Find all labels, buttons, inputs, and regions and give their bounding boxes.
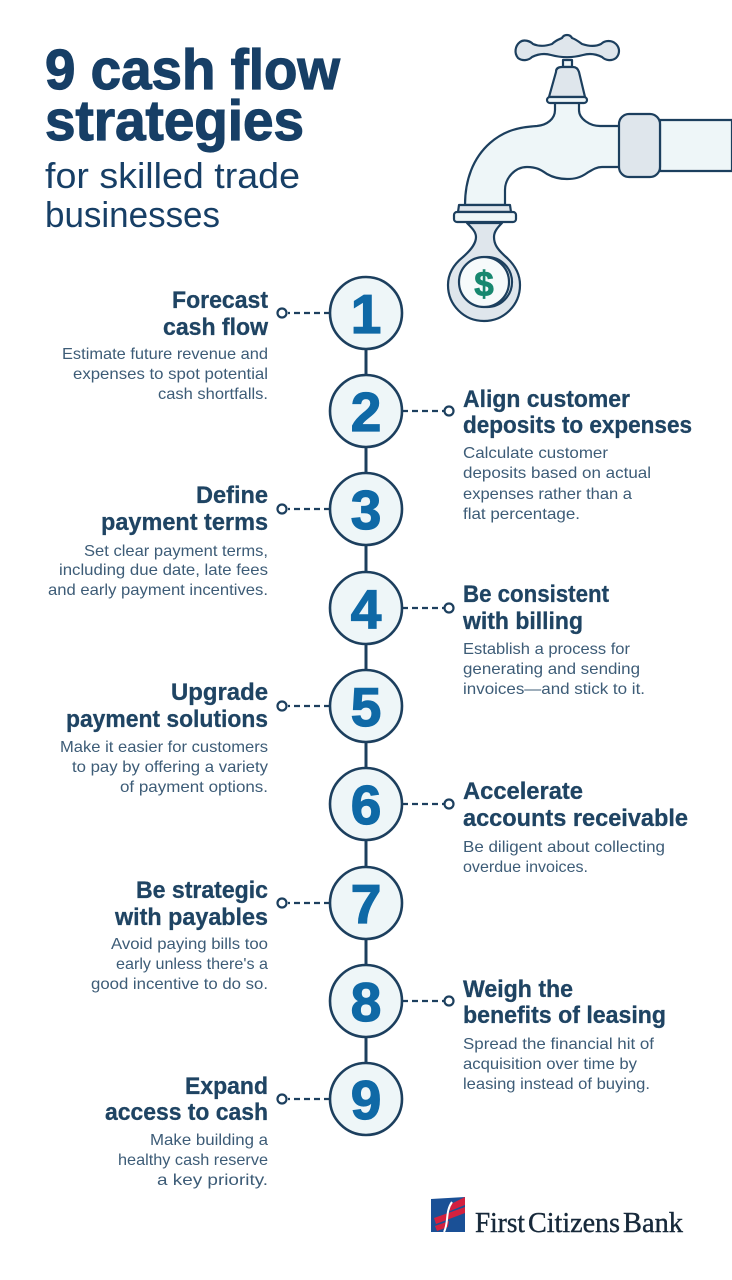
step 1 number: 1: [351, 283, 381, 345]
title: for skilled trade: [45, 155, 300, 196]
title: strategies: [45, 89, 304, 153]
step 9 number: 9: [351, 1069, 381, 1131]
step 1 text: Forecast: [172, 287, 268, 314]
step 1 text: cash flow: [163, 314, 268, 341]
step 6 text: Be diligent about collecting: [463, 839, 665, 856]
step 9 text: access to cash: [105, 1099, 268, 1126]
step 3 text: [48, 482, 268, 599]
step 2 text: [463, 386, 692, 523]
step 7 text: [91, 877, 268, 993]
title: businesses: [45, 194, 220, 235]
step 3 text: payment terms: [101, 509, 268, 536]
step 4 text: invoices—and stick to it.: [463, 681, 645, 698]
step 3 number: [278, 473, 402, 545]
step 7 number: [278, 867, 402, 939]
icon: dripping faucet: $: [474, 265, 494, 304]
step 6 number: [330, 768, 454, 840]
icon: dripping faucet: [448, 35, 732, 321]
step 1 text: cash shortfalls.: [158, 386, 268, 403]
step 1 number: [278, 277, 402, 349]
step 5 text: of payment options.: [120, 779, 268, 796]
step 4 text: [462, 581, 645, 698]
step 8 number: [330, 965, 454, 1037]
step 2 text: deposits based on actual: [463, 465, 651, 482]
step 4 text: with billing: [462, 608, 583, 635]
step 8 text: [463, 976, 666, 1093]
step 1 text: [62, 287, 268, 403]
step 3 text: including due date, late fees: [59, 562, 268, 579]
step 1 text: expenses to spot potential: [73, 366, 268, 383]
logo: First Citizens Bank: Bank: [623, 1207, 683, 1239]
step 8 text: Spread the financial hit of: [463, 1036, 655, 1053]
step 5 number: 5: [351, 676, 381, 738]
step 9 text: Expand: [185, 1073, 268, 1100]
step 6 text: [463, 778, 688, 876]
step 2 number: 2: [351, 381, 381, 443]
step 2 text: deposits to expenses: [463, 412, 692, 439]
step 3 number: 3: [351, 479, 381, 541]
step 2 text: Calculate customer: [463, 445, 608, 462]
step 8 text: acquisition over time by: [463, 1056, 637, 1073]
step 8 text: leasing instead of buying.: [463, 1076, 650, 1093]
step 6 text: overdue invoices.: [463, 859, 588, 876]
step 5 text: Upgrade: [171, 679, 268, 706]
logo: First Citizens Bank: First: [475, 1207, 525, 1239]
step 9 text: a key priority.: [157, 1172, 268, 1189]
step 7 text: early unless there's a: [116, 956, 268, 973]
step 6 text: accounts receivable: [463, 805, 688, 832]
step 5 text: to pay by offering a variety: [72, 759, 268, 776]
step 7 text: Avoid paying bills too: [111, 936, 268, 953]
step 3 text: and early payment incentives.: [48, 582, 268, 599]
step 5 text: Make it easier for customers: [60, 739, 268, 756]
step 4 text: generating and sending: [463, 661, 640, 678]
step 9 text: healthy cash reserve: [118, 1152, 268, 1169]
step 8 number: 8: [351, 971, 381, 1033]
step 8 text: Weigh the: [463, 976, 573, 1003]
step 1 text: Estimate future revenue and: [62, 346, 268, 363]
step 5 number: [278, 670, 402, 742]
step 4 number: 4: [351, 578, 382, 640]
step 8 text: benefits of leasing: [463, 1002, 666, 1029]
step 7 number: 7: [351, 873, 381, 935]
step 2 text: expenses rather than a: [463, 486, 632, 503]
step 7 text: Be strategic: [136, 877, 268, 904]
title: 9 cash flow: [45, 38, 341, 102]
step 4 text: Establish a process for: [463, 641, 630, 658]
step 6 number: 6: [351, 774, 381, 836]
step 7 text: good incentive to do so.: [91, 976, 268, 993]
step 2 text: flat percentage.: [463, 506, 580, 523]
title: [45, 38, 341, 235]
step 5 text: [60, 679, 268, 796]
step 7 text: with payables: [114, 904, 268, 931]
step 2 text: Align customer: [463, 386, 630, 413]
step 3 text: Define: [196, 482, 268, 509]
step 4 number: [330, 572, 454, 644]
step 9 text: [105, 1073, 268, 1189]
logo: First Citizens Bank: [431, 1197, 683, 1239]
step 6 text: Accelerate: [463, 778, 583, 805]
step 2 number: [330, 375, 454, 447]
step 4 text: Be consistent: [463, 581, 609, 608]
step 5 text: payment solutions: [66, 706, 268, 733]
step 9 text: Make building a: [150, 1132, 268, 1149]
step 3 text: Set clear payment terms,: [84, 543, 268, 560]
step 9 number: [278, 1063, 402, 1135]
timeline connector: [364, 349, 368, 1065]
logo: First Citizens Bank: Citizens: [528, 1207, 620, 1239]
